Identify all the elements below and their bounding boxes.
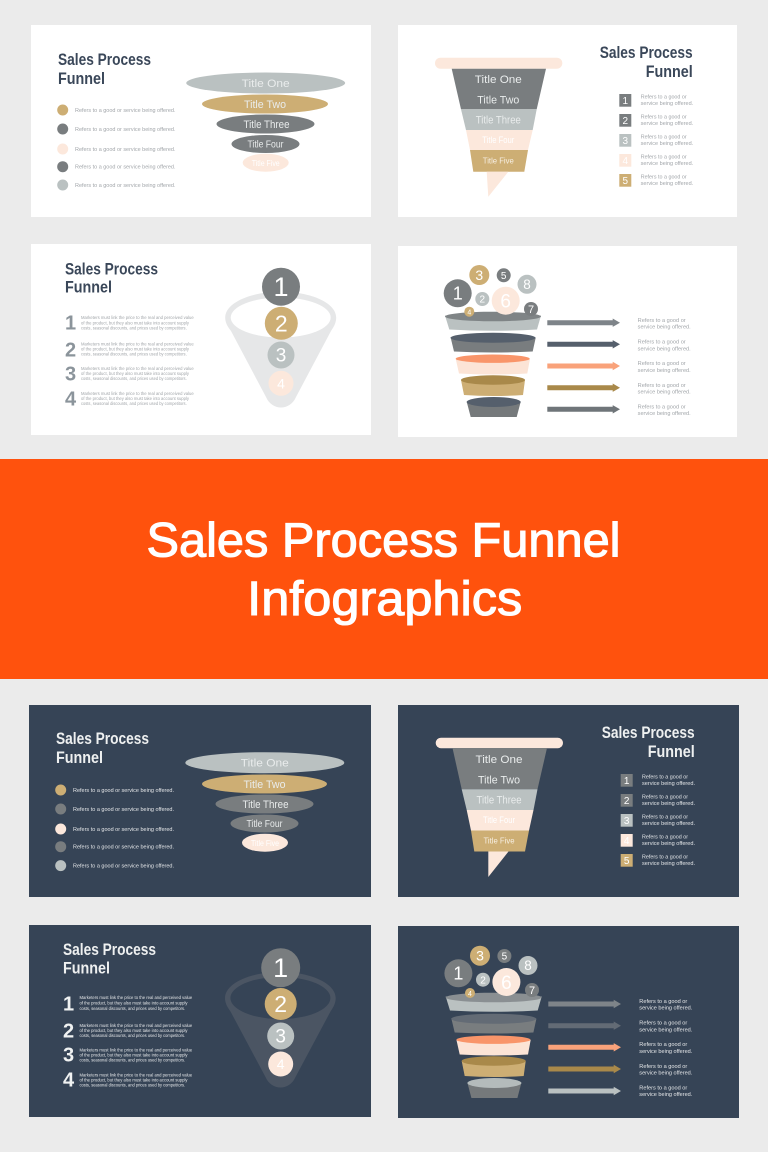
chart: cone funnel with numbered balls: 1 bbox=[273, 272, 289, 302]
title: Infographics bbox=[247, 573, 522, 626]
legend: numbered squares, light: service being offered. bbox=[641, 121, 693, 127]
list: numbered paragraphs, dark: of the product, but they also must take into account supply bbox=[80, 1078, 188, 1082]
chart: stacked ellipses funnel, dark: Title Three bbox=[242, 799, 288, 811]
heading: light ellipse funnel: Sales Process bbox=[58, 50, 151, 69]
heading: dark cone funnel bbox=[63, 940, 156, 977]
labels: light arrows: Refers to a good or bbox=[638, 383, 686, 389]
legend: dark ellipse funnel: Refers to a good or service being offered. bbox=[73, 788, 174, 794]
list: numbered paragraphs, light: 3 bbox=[65, 364, 76, 386]
labels: dark arrows: Refers to a good or bbox=[639, 1064, 688, 1070]
labels: dark arrows: Refers to a good or bbox=[639, 1021, 688, 1027]
chart: stacked ellipses funnel, dark bbox=[185, 752, 344, 852]
panel: light stacked funnel with arrows bbox=[398, 246, 737, 437]
list: numbered paragraphs, light: costs, seasonal discounts, and prices used by competitors. bbox=[81, 352, 187, 356]
chart: cone funnel with numbered balls, dark: 3 bbox=[275, 1027, 286, 1048]
legend: numbered squares, dark: Refers to a good or bbox=[642, 794, 688, 800]
list: numbered paragraphs, light: costs, seasonal discounts, and prices used by competitors. bbox=[81, 326, 187, 331]
labels: dark arrows bbox=[639, 999, 692, 1098]
chart: cone funnel with numbered balls, dark: 4 bbox=[277, 1056, 285, 1072]
heading: dark ellipse funnel: Sales Process bbox=[56, 729, 149, 748]
chart: numbered balls above funnel: 7 bbox=[528, 304, 534, 316]
chart: stacked ellipses funnel: Title One bbox=[242, 78, 290, 90]
chart: trapezoid funnel: Title One bbox=[475, 74, 522, 86]
chart: cone funnel with numbered balls: 2 bbox=[275, 310, 288, 336]
legend: dark ellipse funnel: Refers to a good or service being offered. bbox=[73, 807, 174, 813]
legend: numbered squares, dark: service being offered. bbox=[642, 801, 695, 807]
heading: dark ellipse funnel bbox=[56, 729, 149, 767]
legend: numbered squares, light: service being offered. bbox=[641, 181, 693, 187]
legend: numbered squares, light: 1 bbox=[623, 96, 629, 107]
list: numbered paragraphs, dark: costs, seasonal discounts, and prices used by competitors. bbox=[80, 1006, 185, 1011]
chart: numbered balls above funnel: 4 bbox=[467, 310, 471, 316]
legend: numbered squares, light: service being offered. bbox=[641, 141, 693, 147]
title: Sales Process Funnel bbox=[146, 514, 620, 568]
legend: dark ellipse funnel: Refers to a good or service being offered. bbox=[73, 845, 174, 851]
legend: numbered squares, light: Refers to a good or bbox=[641, 114, 687, 120]
chart: stacked ellipses funnel, dark: Title Five bbox=[251, 839, 279, 848]
chart: numbered balls above funnel, dark: 5 bbox=[502, 952, 508, 963]
chart: numbered balls above funnel: 8 bbox=[523, 277, 531, 292]
legend: numbered squares, light: 4 bbox=[623, 156, 629, 167]
list: numbered paragraphs, light: Marketers must link the price to the real and perceived value bbox=[81, 315, 194, 320]
legend: light ellipse funnel bbox=[57, 104, 176, 190]
labels: light arrows: service being offered. bbox=[638, 346, 691, 352]
legend: numbered squares, dark: Refers to a good or bbox=[642, 854, 688, 860]
legend: numbered squares, light: Refers to a good or bbox=[641, 174, 687, 180]
list: numbered paragraphs, dark: costs, seasonal discounts, and prices used by competitors. bbox=[80, 1033, 185, 1038]
legend: numbered squares, light: service being offered. bbox=[641, 161, 693, 167]
panel: light trapezoid funnel bbox=[398, 25, 737, 217]
heading: light ellipse funnel: Funnel bbox=[58, 69, 105, 88]
legend: numbered squares, dark: service being offered. bbox=[642, 821, 695, 827]
legend: light ellipse funnel: Refers to a good or service being offered. bbox=[75, 183, 176, 189]
labels: dark arrows: service being offered. bbox=[639, 1027, 692, 1033]
list: numbered paragraphs, light bbox=[65, 312, 194, 410]
legend: numbered squares, light bbox=[619, 94, 693, 187]
chart: stacked ellipses funnel: Title Five bbox=[252, 159, 280, 168]
labels: light arrows: Refers to a good or bbox=[638, 318, 686, 324]
chart: trapezoid funnel, dark: Title Two bbox=[478, 774, 520, 786]
list: numbered paragraphs, light: Marketers must link the price to the real and perceived value bbox=[81, 342, 194, 346]
list: numbered paragraphs, dark: of the product, but they also must take into account supply bbox=[80, 1000, 188, 1006]
list: numbered paragraphs, dark: Marketers must link the price to the real and perceived value bbox=[80, 1072, 193, 1078]
chart: trapezoid funnel, dark: Title One bbox=[476, 754, 522, 766]
heading: dark trapezoid funnel: Funnel bbox=[648, 742, 695, 761]
chart: numbered balls above funnel: 1 bbox=[453, 284, 463, 304]
list: numbered paragraphs, dark: 3 bbox=[63, 1045, 74, 1067]
legend: numbered squares, dark: 3 bbox=[624, 816, 630, 827]
legend: numbered squares, light: 5 bbox=[623, 176, 629, 187]
chart: cone funnel with numbered balls: 3 bbox=[276, 346, 286, 367]
labels: light arrows: Refers to a good or bbox=[638, 340, 686, 346]
title bbox=[146, 514, 620, 626]
legend: numbered squares, dark: 2 bbox=[624, 796, 630, 807]
arrows: light panel bbox=[547, 318, 620, 414]
chart: cone funnel with numbered balls bbox=[225, 268, 336, 408]
list: numbered paragraphs, light: 1 bbox=[65, 312, 76, 334]
heading: light trapezoid funnel: Sales Process bbox=[600, 43, 693, 62]
labels: dark arrows: Refers to a good or bbox=[639, 1042, 688, 1048]
legend: numbered squares, light: 3 bbox=[623, 136, 629, 147]
labels: light arrows: service being offered. bbox=[638, 325, 691, 331]
list: numbered paragraphs, dark: of the product, but they also must take into account supply bbox=[80, 1028, 188, 1033]
list: numbered paragraphs, dark bbox=[63, 994, 193, 1092]
list: numbered paragraphs, light: Marketers must link the price to the real and perceived value bbox=[81, 391, 194, 396]
chart: trapezoid funnel, dark: Title Four bbox=[483, 815, 515, 825]
heading: dark trapezoid funnel bbox=[602, 723, 695, 761]
chart: numbered balls above funnel, dark: 2 bbox=[480, 975, 486, 986]
list: numbered paragraphs, dark: Marketers must link the price to the real and perceived value bbox=[80, 1023, 193, 1028]
labels: dark arrows: service being offered. bbox=[639, 1006, 692, 1012]
list: numbered paragraphs, dark: costs, seasonal discounts, and prices used by competitors. bbox=[80, 1082, 185, 1088]
list: numbered paragraphs, light: 2 bbox=[65, 340, 76, 362]
chart: stacked ellipses funnel bbox=[186, 72, 345, 172]
labels: light arrows bbox=[638, 318, 691, 417]
panel: dark cone funnel bbox=[29, 925, 371, 1117]
chart: numbered balls above funnel, dark: 8 bbox=[524, 958, 532, 973]
heading: light cone funnel: Sales Process bbox=[65, 259, 158, 278]
chart: numbered balls above funnel, dark: 1 bbox=[453, 964, 463, 984]
chart: five-tier funnel bbox=[445, 312, 541, 417]
labels: dark arrows: Refers to a good or bbox=[639, 999, 688, 1005]
legend: numbered squares, dark: Refers to a good or bbox=[642, 814, 688, 820]
legend: numbered squares, dark: service being offered. bbox=[642, 781, 695, 787]
list: numbered paragraphs, dark: of the product, but they also must take into account supply bbox=[80, 1052, 188, 1058]
heading: light cone funnel bbox=[65, 259, 158, 297]
labels: light arrows: Refers to a good or bbox=[638, 361, 686, 367]
labels: light arrows: service being offered. bbox=[638, 411, 691, 417]
chart: stacked ellipses funnel, dark: Title One bbox=[241, 758, 289, 770]
legend: numbered squares, dark: service being offered. bbox=[642, 861, 695, 867]
legend: dark ellipse funnel: Refers to a good or service being offered. bbox=[73, 864, 174, 870]
heading: light cone funnel: Funnel bbox=[65, 278, 112, 297]
chart: numbered balls above funnel: 6 bbox=[500, 292, 511, 312]
labels: dark arrows: Refers to a good or bbox=[639, 1085, 688, 1091]
labels: dark arrows: service being offered. bbox=[639, 1092, 692, 1098]
chart: trapezoid funnel, dark: Title Three bbox=[476, 794, 522, 806]
legend: light ellipse funnel: Refers to a good or service being offered. bbox=[75, 147, 176, 153]
heading: dark ellipse funnel: Funnel bbox=[56, 748, 103, 767]
heading: light trapezoid funnel bbox=[600, 43, 693, 81]
list: numbered paragraphs, light: 4 bbox=[65, 388, 77, 410]
panel: dark stacked funnel with arrows bbox=[398, 926, 739, 1118]
list: numbered paragraphs, light: costs, seasonal discounts, and prices used by competitors. bbox=[81, 376, 187, 381]
legend: numbered squares, dark: Refers to a good or bbox=[642, 774, 688, 780]
chart: trapezoid funnel, dark: Title Five bbox=[484, 835, 515, 845]
heading: dark trapezoid funnel: Sales Process bbox=[602, 723, 695, 742]
labels: dark arrows: service being offered. bbox=[639, 1049, 692, 1055]
chart: trapezoid funnel: Title Five bbox=[483, 155, 514, 165]
chart: cone funnel with numbered balls, dark: 1 bbox=[273, 953, 288, 983]
legend: numbered squares, light: service being offered. bbox=[641, 101, 693, 107]
legend: numbered squares, dark: 5 bbox=[624, 856, 630, 867]
legend: dark ellipse funnel bbox=[55, 784, 174, 871]
chart: stacked ellipses funnel: Title Two bbox=[244, 99, 286, 111]
chart: numbered balls above funnel: 3 bbox=[475, 267, 483, 283]
list: numbered paragraphs, light: of the product, but they also must take into account supply bbox=[81, 371, 190, 376]
heading: light trapezoid funnel: Funnel bbox=[646, 62, 693, 81]
labels: light arrows: service being offered. bbox=[638, 368, 691, 374]
legend: numbered squares, dark: 4 bbox=[624, 836, 630, 847]
chart: cone funnel with numbered balls, dark bbox=[225, 948, 336, 1088]
list: numbered paragraphs, dark: Marketers must link the price to the real and perceived value bbox=[80, 995, 193, 1000]
banner: orange title band bbox=[0, 459, 768, 679]
list: numbered paragraphs, light: of the product, but they also must take into account supply bbox=[81, 346, 190, 352]
chart: trapezoid funnel, dark bbox=[436, 738, 563, 877]
legend: light ellipse funnel: Refers to a good or service being offered. bbox=[75, 127, 176, 133]
legend: numbered squares, light: Refers to a good or bbox=[641, 94, 687, 100]
heading: dark cone funnel: Funnel bbox=[63, 958, 110, 977]
list: numbered paragraphs, dark: 2 bbox=[63, 1020, 74, 1042]
legend: numbered squares, dark bbox=[621, 774, 695, 867]
panel: light ellipse funnel bbox=[31, 25, 371, 217]
list: numbered paragraphs, light: Marketers must link the price to the real and perceived value bbox=[81, 366, 194, 371]
chart: stacked ellipses funnel: Title Three bbox=[244, 119, 290, 131]
panel: light cone funnel bbox=[31, 244, 371, 435]
chart: numbered balls above funnel: 2 bbox=[480, 295, 486, 306]
list: numbered paragraphs, dark: costs, seasonal discounts, and prices used by competitors. bbox=[80, 1058, 185, 1062]
chart: numbered balls above funnel, dark: 6 bbox=[501, 973, 512, 994]
chart: stacked ellipses funnel: Title Four bbox=[248, 140, 284, 150]
chart: numbered balls above funnel, dark: 4 bbox=[468, 991, 472, 998]
legend: numbered squares, light: Refers to a good or bbox=[641, 134, 687, 140]
panel: dark ellipse funnel bbox=[29, 705, 371, 897]
legend: numbered squares, dark: service being offered. bbox=[642, 841, 695, 847]
chart: numbered balls above funnel: 5 bbox=[501, 271, 507, 282]
heading: dark cone funnel: Sales Process bbox=[63, 940, 156, 959]
chart: trapezoid funnel: Title Four bbox=[482, 135, 514, 145]
chart: numbered balls above funnel bbox=[444, 265, 538, 317]
labels: light arrows: Refers to a good or bbox=[638, 404, 686, 410]
legend: numbered squares, light: 2 bbox=[623, 116, 629, 127]
legend: numbered squares, dark: Refers to a good or bbox=[642, 834, 688, 840]
chart: cone funnel with numbered balls, dark: 2 bbox=[274, 991, 287, 1017]
heading: light ellipse funnel bbox=[58, 50, 151, 88]
list: numbered paragraphs, dark: 1 bbox=[63, 994, 74, 1016]
chart: numbered balls above funnel, dark: 7 bbox=[529, 985, 535, 997]
chart: trapezoid funnel: Title Two bbox=[477, 94, 519, 106]
chart: stacked ellipses funnel, dark: Title Two bbox=[244, 779, 286, 791]
chart: stacked ellipses funnel, dark: Title Four bbox=[246, 819, 283, 830]
chart: cone funnel with numbered balls: 4 bbox=[277, 376, 285, 392]
list: numbered paragraphs, light: of the product, but they also must take into account supply bbox=[81, 320, 190, 325]
chart: five-tier funnel, dark bbox=[446, 993, 542, 1098]
list: numbered paragraphs, dark: Marketers must link the price to the real and perceived value bbox=[80, 1048, 193, 1052]
chart: trapezoid funnel bbox=[435, 58, 562, 197]
chart: trapezoid funnel: Title Three bbox=[476, 114, 521, 126]
legend: numbered squares, light: Refers to a good or bbox=[641, 154, 687, 160]
legend: dark ellipse funnel: Refers to a good or service being offered. bbox=[73, 827, 174, 833]
chart: numbered balls above funnel, dark: 3 bbox=[476, 948, 484, 964]
arrows: dark panel bbox=[548, 1000, 621, 1095]
list: numbered paragraphs, light: costs, seasonal discounts, and prices used by competitors. bbox=[81, 401, 187, 406]
legend: light ellipse funnel: Refers to a good or service being offered. bbox=[75, 165, 176, 171]
list: numbered paragraphs, dark: 4 bbox=[63, 1070, 75, 1092]
list: numbered paragraphs, light: of the product, but they also must take into account supply bbox=[81, 396, 190, 401]
panel: dark trapezoid funnel bbox=[398, 705, 739, 897]
chart: numbered balls above funnel, dark bbox=[444, 946, 539, 998]
legend: light ellipse funnel: Refers to a good or service being offered. bbox=[75, 108, 176, 114]
labels: dark arrows: service being offered. bbox=[639, 1070, 692, 1076]
legend: numbered squares, dark: 1 bbox=[624, 776, 630, 787]
labels: light arrows: service being offered. bbox=[638, 390, 691, 396]
